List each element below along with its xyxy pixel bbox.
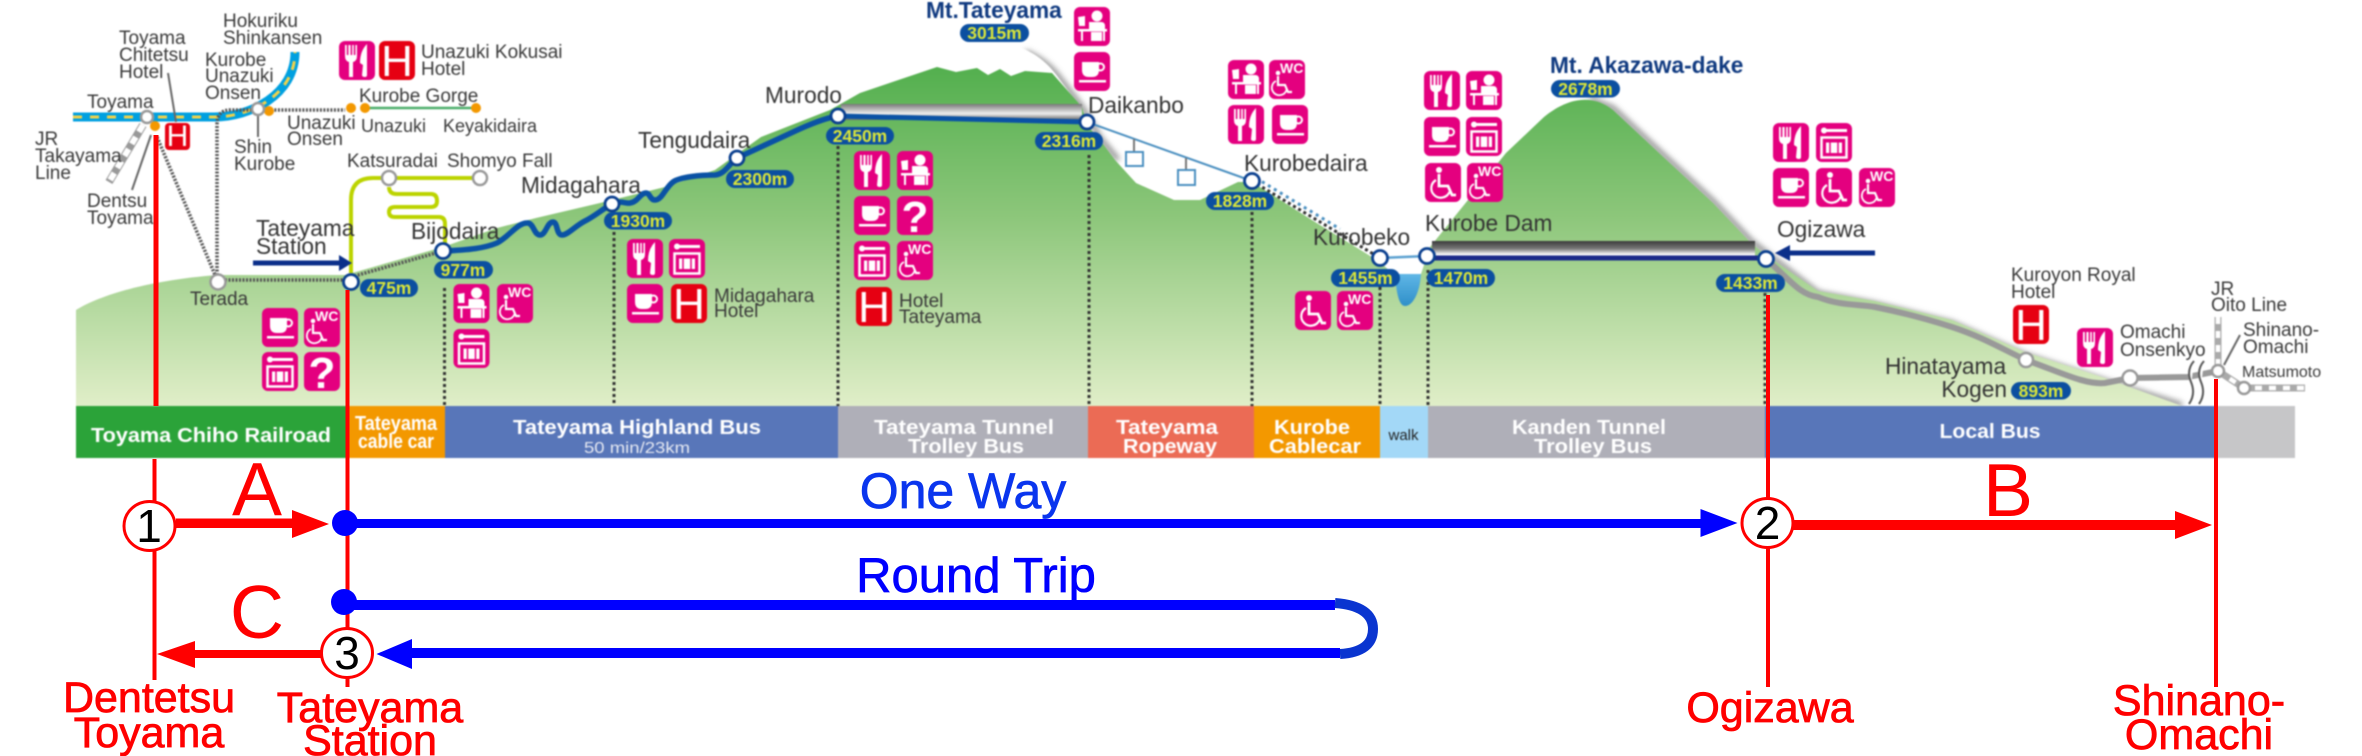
icons: Murodo <box>854 151 933 332</box>
icons: Kurobeko: WC <box>1348 291 1371 307</box>
destination: Shinano-Omachi <box>2113 677 2285 756</box>
marker 1 <box>124 500 175 552</box>
band: Tateyama Tunnel Trolley Bus: Trolley Bus <box>908 436 1024 458</box>
labels: left rail network: Kurobe <box>205 50 266 71</box>
icons: Kurobe Dam: WC <box>1478 163 1501 179</box>
elevation: 1470m: 1470m <box>1434 268 1488 288</box>
labels: left rail network: Takayama <box>35 146 122 167</box>
band: Tateyama cable car: cable car <box>358 431 434 453</box>
labels: hotels and right side stations: Hotel <box>2011 282 2055 303</box>
band: Tateyama Ropeway <box>1088 406 1254 458</box>
destination: Dentetsu Toyama: Toyama <box>74 709 224 756</box>
walkway <box>1380 256 1427 258</box>
band: Tateyama Tunnel Trolley Bus <box>838 406 1088 458</box>
labels: main stations: Ogizawa <box>1777 216 1866 242</box>
icons: Ogizawa <box>1773 123 1895 207</box>
destination: Tateyama Station: Tateyama <box>277 684 463 732</box>
elevation: 893m: 893m <box>2019 381 2063 401</box>
highland bus route <box>443 116 838 251</box>
heading: Round Trip: Round Trip <box>856 549 1096 603</box>
band: Tateyama cable car: Tateyama <box>355 413 438 435</box>
heading: One Way: One Way <box>860 463 1066 519</box>
labels: hotels and right side stations: Onsenkyo <box>2120 340 2206 361</box>
mountain shadow <box>1025 52 2182 405</box>
labels: main stations: Station <box>256 233 327 259</box>
labels: hotels and right side stations: Omachi <box>2243 337 2308 358</box>
labels: left rail network: Unazuki <box>287 113 356 134</box>
band: Kanden Tunnel Trolley Bus: Trolley Bus <box>1534 436 1652 458</box>
marker 3 <box>322 627 372 679</box>
labels: left rail network: Chitetsu <box>119 45 189 66</box>
labels: left rail network: Katsuradai <box>347 151 438 172</box>
labels: hotels and right side stations: Hotel <box>714 301 758 322</box>
labels: left rail network: Unazuki <box>361 116 426 136</box>
red arrow B <box>1793 511 2212 539</box>
band: Local Bus: Local Bus <box>1940 421 2040 443</box>
icons: Bijodaira: WC <box>508 284 531 300</box>
main stations <box>344 109 1774 290</box>
leg letter C: C <box>230 570 284 654</box>
labels: left rail network: Shin <box>234 137 272 158</box>
marker 2: 2 <box>1755 497 1780 549</box>
red marker lines <box>152 135 2218 687</box>
icons: Tateyama Station <box>262 308 340 398</box>
band: Toyama Chiho Railroad: Toyama Chiho Railroad <box>91 425 331 447</box>
labels: hotels and right side stations: Kuroyon Royal <box>2011 265 2136 286</box>
labels: main stations: Kurobeko <box>1313 224 1410 250</box>
Kanden tunnel line <box>1427 256 1766 260</box>
labels: left rail network: Unazuki <box>205 66 274 87</box>
Tateyama tunnel shading <box>841 104 1082 120</box>
orange stations <box>150 103 481 131</box>
elevation: 2450m: 2450m <box>833 126 887 146</box>
local railway tracks <box>157 110 443 282</box>
labels: left rail network: JR <box>35 129 58 150</box>
band: Kurobe Cablecar: Cablecar <box>1269 436 1361 458</box>
band: Tateyama Highland Bus <box>445 406 838 458</box>
marker 1: 1 <box>136 500 162 552</box>
destination: Shinano-Omachi: Shinano- <box>2113 677 2285 725</box>
labels: left rail network <box>35 11 563 310</box>
band: Tateyama Highland Bus: Tateyama Highland Bus <box>513 417 761 439</box>
icons: Bijodaira <box>454 284 533 368</box>
Shomyo bus line <box>351 178 480 273</box>
labels: hotels and right side stations: JR <box>2211 279 2234 300</box>
icons: Midagahara: H <box>673 280 705 329</box>
red arrow C <box>157 641 321 668</box>
elevation: 1930m: 1930m <box>611 211 665 231</box>
Kurobe cablecar line <box>1252 181 1380 258</box>
band: Local Bus <box>1765 406 2215 458</box>
elevation: 2678m: 2678m <box>1558 79 1613 99</box>
blue dot: one way start <box>332 510 358 536</box>
snow cap <box>900 43 1084 120</box>
labels: main stations: Tengudaira <box>638 127 751 153</box>
band: end section <box>2215 406 2295 458</box>
band: Toyama Chiho Railroad <box>76 406 347 458</box>
labels: left rail network: Unazuki Kokusai <box>421 42 563 63</box>
elevation: 1433m: 1433m <box>1723 273 1778 293</box>
labels: main stations: Hinatayama <box>1885 353 2006 379</box>
labels: hotels and right side stations: Hotel <box>899 291 943 312</box>
lake <box>1395 274 1421 306</box>
icons: Tateyama Station: ? <box>309 349 335 398</box>
ropeway <box>1087 122 1252 185</box>
icons: Murodo: WC <box>908 241 931 257</box>
icons: Murodo: ? <box>902 193 928 242</box>
band: walk <box>1380 406 1428 458</box>
transport band <box>76 406 2295 458</box>
icons: Daikanbo <box>1074 7 1110 91</box>
band: Tateyama Ropeway: Ropeway <box>1123 436 1218 458</box>
marker 3: 3 <box>334 627 360 679</box>
labels: left rail network: Onsen <box>287 129 343 150</box>
blue route: Round Trip <box>331 589 1373 669</box>
elevation: 2300m: 2300m <box>733 169 787 189</box>
access arrow: Ogizawa <box>1775 245 1875 261</box>
labels: left rail network: Toyama <box>119 28 186 49</box>
icons: Murodo: H <box>858 283 890 332</box>
elevation: 1828m: 1828m <box>1213 191 1267 211</box>
destination: Dentetsu Toyama <box>63 674 235 756</box>
labels: hotels and right side stations <box>714 265 2321 381</box>
Hokuriku Shinkansen line <box>73 52 295 117</box>
band: Kurobe Cablecar: Kurobe <box>1274 417 1350 439</box>
icons: Kurobedaira: WC <box>1280 60 1303 76</box>
access arrow: Tateyama <box>253 255 352 271</box>
mountain silhouette <box>76 67 2182 406</box>
labels: left rail network: Kurobe <box>234 154 295 175</box>
elevation: 1455m: 1455m <box>1338 268 1393 288</box>
icons: Kurobeko <box>1295 291 1373 330</box>
elevation: 2316m: 2316m <box>1042 131 1096 151</box>
leader lines <box>132 73 2240 365</box>
labels: hotels and right side stations: Matsumoto <box>2242 364 2321 381</box>
labels: main stations: Kurobedaira <box>1244 150 1368 176</box>
labels: main stations: Murodo <box>765 82 842 108</box>
band: Tateyama Ropeway: Tateyama <box>1116 417 1219 439</box>
labels: left rail network: Keyakidaira <box>443 116 538 136</box>
labels: left rail network: Hotel <box>421 59 465 80</box>
station drop lines <box>444 146 1765 406</box>
Kurobe Gorge railway <box>365 107 476 109</box>
band: walk: walk <box>1387 427 1419 444</box>
icons: Midagahara <box>627 239 707 329</box>
icon: Kuroyon Royal Hotel: H <box>2015 301 2047 350</box>
band: Kurobe Cablecar <box>1254 406 1380 458</box>
labels: main stations: Kogen <box>1941 376 2007 402</box>
blue route: One Way <box>345 509 1738 537</box>
labels: left rail network: Terada <box>190 289 249 310</box>
JR Takayama line <box>109 125 143 182</box>
labels: hotels and right side stations: Midagahara <box>714 286 815 307</box>
labels: main stations <box>256 82 2007 402</box>
labels: left rail network: Shomyo Fall <box>447 151 553 172</box>
labels: main stations: Tateyama <box>256 215 355 241</box>
labels: main stations: Daikanbo <box>1088 92 1184 118</box>
tunnel trolley line <box>838 116 1087 122</box>
route diagram <box>35 0 2321 458</box>
leg letter B: B <box>1983 448 2033 532</box>
red arrow A <box>176 510 329 538</box>
band: Kanden Tunnel Trolley Bus: Kanden Tunnel <box>1512 417 1666 439</box>
labels: left rail network: Hotel <box>119 62 163 83</box>
labels: hotels and right side stations: Tateyama <box>899 307 982 328</box>
icons: Kurobedaira <box>1228 60 1308 144</box>
grey stations <box>141 103 2250 394</box>
labels: left rail network: Dentsu <box>87 191 147 212</box>
band: Tateyama Highland Bus: 50 min/23km <box>584 440 690 457</box>
marker 2 <box>1742 497 1793 549</box>
band: Tateyama Tunnel Trolley Bus: Tateyama Tunnel <box>874 417 1054 439</box>
elevation: 3015m: 3015m <box>967 23 1022 43</box>
labels: main stations: Bijodaira <box>411 218 500 244</box>
labels: left rail network: Toyama <box>87 92 154 113</box>
icon: Toyama hotel: H <box>167 120 188 153</box>
labels: hotels and right side stations: Shinano- <box>2243 320 2319 341</box>
labels: left rail network: Line <box>35 163 71 184</box>
icons: Unazuki <box>339 37 415 86</box>
labels: main stations: Midagahara <box>521 172 641 198</box>
labels: hotels and right side stations: Omachi <box>2120 322 2185 343</box>
icons: Tateyama Station: WC <box>315 308 338 324</box>
icons: Kurobe Dam <box>1424 71 1503 202</box>
Kanden tunnel shading <box>1432 241 1755 258</box>
elevation: 977m: 977m <box>441 260 485 280</box>
band: Kanden Tunnel Trolley Bus <box>1428 406 1765 458</box>
icons: Ogizawa: WC <box>1870 168 1893 184</box>
labels: left rail network: Shinkansen <box>223 28 322 49</box>
destination: Tateyama Station <box>277 684 463 756</box>
destination: Dentetsu Toyama: Dentetsu <box>63 674 235 722</box>
local bus road <box>1766 259 2218 383</box>
labels: hotels and right side stations: Oito Line <box>2211 295 2287 316</box>
band: Tateyama cable car <box>347 406 445 458</box>
icon: Omachi Onsenkyo restaurant <box>2077 328 2113 367</box>
leg letter A: A <box>232 447 282 531</box>
destination: Ogizawa: Ogizawa <box>1686 684 1854 732</box>
labels: left rail network: Toyama <box>87 208 154 229</box>
labels: left rail network: Onsen <box>205 83 261 104</box>
labels: main stations: Kurobe Dam <box>1425 210 1552 236</box>
elevation: 475m: 475m <box>367 278 411 298</box>
mountain name: Mt. Akazawa-dake: Mt. Akazawa-dake <box>1550 52 1743 78</box>
Oito line <box>2218 317 2305 388</box>
labels: left rail network: Kurobe Gorge <box>359 86 478 107</box>
icons: Unazuki: H <box>381 37 413 86</box>
labels: left rail network: Hokuriku <box>223 11 298 32</box>
line break mark <box>2189 361 2204 404</box>
